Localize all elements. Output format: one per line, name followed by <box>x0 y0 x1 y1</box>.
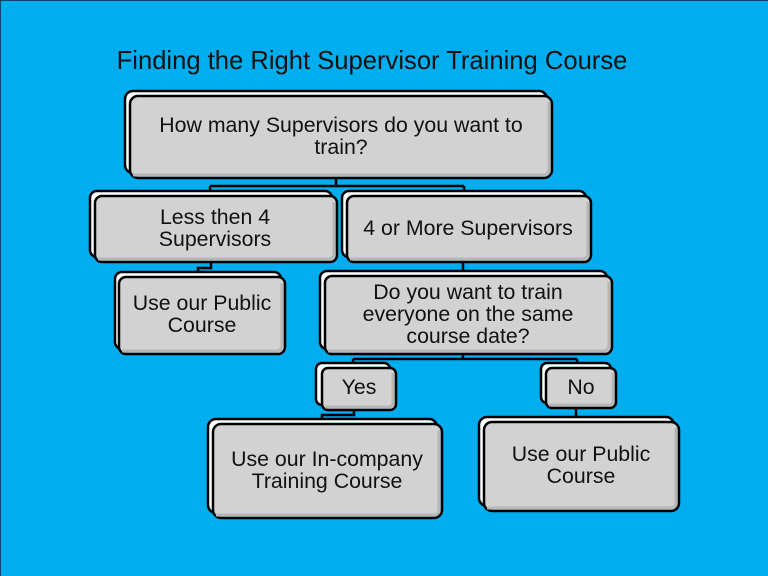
box: Yes: Yes <box>342 375 376 399</box>
box: Less then 4 Supervisors <box>90 191 337 262</box>
box: No: No <box>567 375 595 399</box>
box: 4 or More Supervisors <box>342 191 591 262</box>
box: How many supervisors <box>125 91 552 178</box>
box: 4 or More Supervisors: 4 or More Supervisors <box>363 216 573 240</box>
box: Use our Public Course (left): Course <box>168 313 236 337</box>
box: Do you want to train everyone: Do you want to train <box>373 280 563 304</box>
box: Less then 4 Supervisors: Supervisors <box>159 227 271 251</box>
box: Use our In-company Training Course <box>208 419 442 518</box>
box: Use our Public Course (right) <box>479 417 679 511</box>
box: Use our Public Course (left): Use our Public <box>133 291 272 315</box>
box: Less then 4 Supervisors: Less then 4 <box>160 205 270 229</box>
box: Use our Public Course (right): Course <box>547 464 615 488</box>
box: Do you want to train everyone: course date? <box>406 324 530 348</box>
box: Do you want to train everyone: everyone on the same <box>363 302 573 326</box>
box: Do you want to train everyone <box>320 271 612 354</box>
box: How many supervisors: train? <box>314 135 368 159</box>
box: No <box>541 363 616 408</box>
title: Finding the Right Supervisor Training Course <box>117 47 627 75</box>
box: Use our Public Course (right): Use our Public <box>512 442 651 466</box>
box: How many supervisors: How many Supervisors do you want to <box>159 113 523 137</box>
box: Use our In-company Training Course: Training Course <box>252 469 402 493</box>
box: Use our In-company Training Course: Use our In-company <box>231 447 423 471</box>
connector lines <box>198 178 577 420</box>
box: Use our Public Course (left) <box>115 272 285 354</box>
box: Yes <box>316 363 396 410</box>
